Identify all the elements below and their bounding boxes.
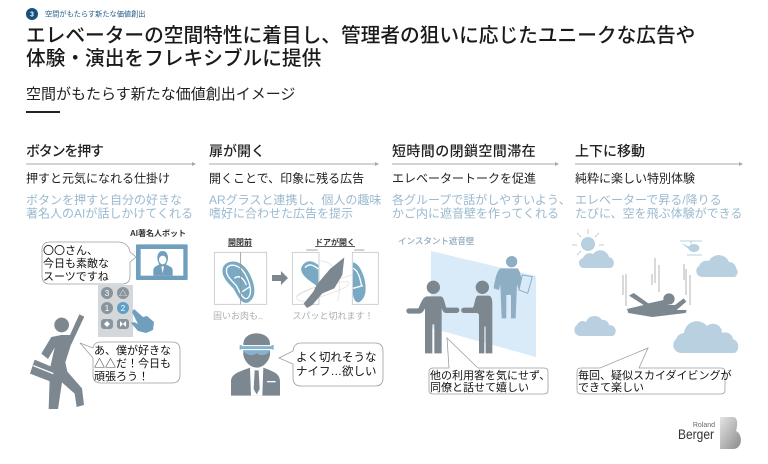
icon: cloud 3 xyxy=(574,316,616,336)
subtitle: 空間がもたらす新たな価値創出イメージ xyxy=(26,86,295,103)
arrow xyxy=(392,163,555,165)
logo: Roland Berger: Berger xyxy=(678,426,714,442)
icon: elevator button panel: 3 xyxy=(105,289,110,298)
icon: elevator button panel: △ xyxy=(119,289,127,298)
speech bubble: user: あ、僕が好きな xyxy=(94,343,171,357)
subtitle underline xyxy=(26,111,60,113)
logo: Roland Berger xyxy=(678,417,741,449)
description: ボタンを押すと自分の好きな xyxy=(26,193,182,207)
subheading: 押すと元気になれる仕掛け xyxy=(26,170,170,186)
icon: cloud 2 xyxy=(696,255,738,277)
icon: cheering businessman xyxy=(30,314,84,409)
heading: 扉が開く: 扉が開く xyxy=(209,143,265,159)
icon: elevator button panel: 2 xyxy=(121,304,126,313)
speech bubble: AI: スーツですね xyxy=(43,270,109,283)
icon: man with AR glasses xyxy=(231,333,280,396)
panel: ボタンを押す xyxy=(26,143,196,409)
label: instant sound wall: インスタント遮音壁 xyxy=(398,236,475,246)
arrow xyxy=(575,163,739,165)
door before opening with steak xyxy=(214,252,267,304)
speech bubble: user xyxy=(80,342,180,383)
description: かご内に遮音壁を作ってくれる xyxy=(392,206,559,220)
panel: 扉が開く xyxy=(209,143,383,396)
icon: elevator button panel xyxy=(98,285,133,337)
section badge: 3 xyxy=(30,12,34,18)
speech bubble: AR user xyxy=(279,343,383,386)
speech bubble: AI xyxy=(42,242,136,284)
logo: Roland Berger: Roland xyxy=(693,422,715,429)
subheading: 純粋に楽しい特別体験 xyxy=(575,170,695,186)
icon: screen with AI celebrity xyxy=(136,244,188,280)
icon: pointing hand xyxy=(131,309,154,333)
speech bubble: AR user: よく切れそうな xyxy=(296,351,376,364)
speech bubble: coworkers: 同僚と話せて嬉しい xyxy=(430,380,529,394)
caption: after: スパッと切れます！ xyxy=(292,311,374,321)
figure: left man xyxy=(406,281,459,353)
panel: 上下に移動 xyxy=(572,143,743,394)
icon: cloud 1 xyxy=(579,250,614,268)
icon: helicopter xyxy=(680,241,702,255)
speech bubble: skydiving: できて楽しい xyxy=(578,381,644,394)
arrow head xyxy=(555,162,559,166)
heading: 短時間の閉鎖空間滞在: 短時間の閉鎖空間滞在 xyxy=(392,143,536,159)
label: door opens: ドアが開く xyxy=(315,237,355,247)
speech bubble: user: 頑張ろう！ xyxy=(94,370,149,383)
arrow xyxy=(209,163,375,165)
label: AI bot: AI著名人ボット xyxy=(130,228,186,238)
section badge: 空間がもたらす新たな価値創出 xyxy=(45,10,145,18)
title: 体験・演出をフレキシブルに提供 xyxy=(26,47,321,70)
speech bubble: coworkers xyxy=(429,338,550,394)
speech bubble: AI: 今日も素敵な xyxy=(43,256,109,270)
speech bubble: user: △△だ！今日も xyxy=(94,356,171,370)
description: エレベーターで昇る/降りる xyxy=(575,193,722,207)
icon: cloud 4 xyxy=(673,321,738,353)
icon: elevator button panel: 1 xyxy=(105,304,110,313)
arrow head xyxy=(375,162,379,166)
sound wall xyxy=(431,251,536,357)
icon: skydiver xyxy=(627,293,687,317)
speech bubble: skydiving xyxy=(577,348,732,394)
heading: ボタンを押す: ボタンを押す xyxy=(26,143,104,159)
description: 各グループで話がしやすいよう、 xyxy=(392,192,571,207)
speech bubble: skydiving: 毎回、疑似スカイダイビングが xyxy=(578,368,732,382)
icon: sun xyxy=(572,229,604,255)
caption: before: 固いお肉も.. xyxy=(213,310,263,321)
description: 嗜好に合わせた広告を提示 xyxy=(209,206,353,220)
speed lines xyxy=(623,258,690,306)
section badge xyxy=(26,8,145,20)
speech bubble: AI: 〇〇さん、 xyxy=(43,244,98,257)
arrow: transition xyxy=(272,271,288,285)
speech bubble: AR user: ナイフ…欲しい xyxy=(296,364,376,378)
subheading: 開くことで、印象に残る広告 xyxy=(209,172,364,186)
subheading: エレベータートークを促進 xyxy=(392,172,536,186)
figure: right man xyxy=(461,281,492,353)
description: ARグラスと連携し、個人の趣味 xyxy=(209,192,381,207)
label: before opening: 開閉前 xyxy=(228,237,252,247)
heading: 上下に移動: 上下に移動 xyxy=(575,143,645,159)
panel: 短時間の閉鎖空間滞在 xyxy=(392,143,571,394)
speech bubble: coworkers: 他の利用客を気にせず、 xyxy=(430,368,550,382)
door opening with knife and steak xyxy=(292,250,378,308)
arrow head xyxy=(192,162,196,166)
arrow head xyxy=(739,162,743,166)
description: たびに、空を飛ぶ体験ができる xyxy=(575,206,742,220)
description: 著名人のAIが話しかけてくれる xyxy=(26,206,193,220)
figure: person behind wall xyxy=(494,256,532,318)
arrow xyxy=(26,163,192,165)
title: エレベーターの空間特性に着目し、管理者の狙いに応じたユニークな広告や xyxy=(26,25,695,47)
